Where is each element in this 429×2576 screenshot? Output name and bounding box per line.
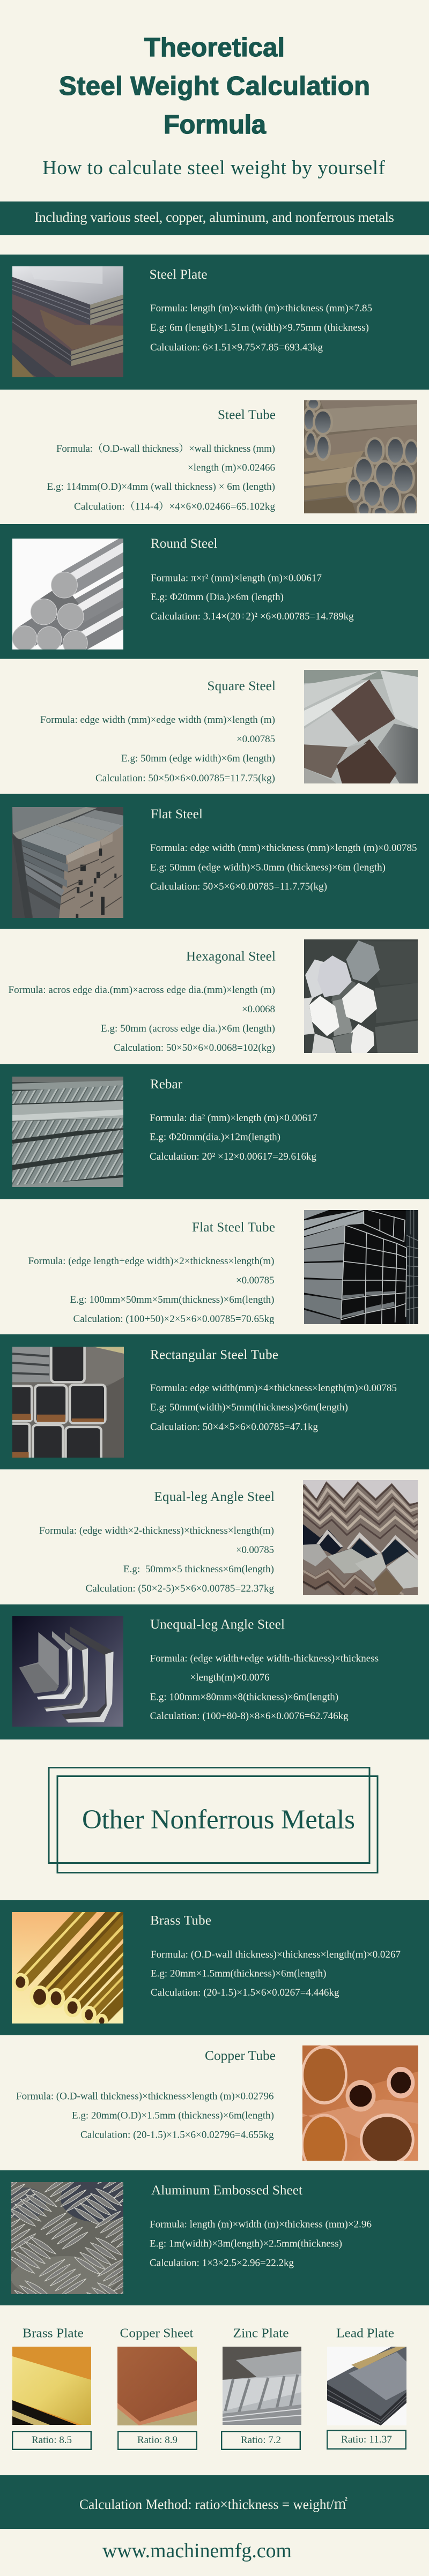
formula text: Formula:（O.D-wall thickness）×wall thickness (mm): [56, 443, 275, 454]
photo: hexagonal steel bars: [304, 939, 418, 1053]
band: calculation method: Calculation Method: ratio×thickness = weight/㎡: [79, 2497, 347, 2512]
panel: round steel: [0, 524, 429, 659]
formula text: E.g: 50mm (edge width)×6m (length): [121, 753, 275, 764]
formula text: E.g: 50mm(width)×5mm(thickness)×6m(length): [150, 1402, 348, 1413]
formula text: E.g: 50mm×5 thickness×6m(length): [123, 1564, 274, 1575]
photo: copper tubes: [302, 2045, 418, 2161]
formula text: [40, 714, 275, 784]
formula text: Calculation: (20-1.5)×1.5×6×0.02796=4.655kg: [80, 2130, 274, 2140]
heading: square steel: Square Steel: [207, 679, 276, 693]
formula text: Calculation: (20-1.5)×1.5×6×0.0267=4.446kg: [151, 1987, 339, 1998]
band: calculation method: [0, 2475, 429, 2529]
formula text: Calculation: 50×50×6×0.0068=102(kg): [114, 1042, 275, 1054]
formula text: [39, 1525, 275, 1594]
formula text: [16, 2091, 274, 2140]
panel: brass tube: [0, 1900, 429, 2035]
formula text: E.g: 100mm×50mm×5mm(thickness)×6m(length): [70, 1294, 275, 1305]
formula text: [150, 1112, 317, 1162]
formula text: Calculation: 6×1.51×9.75×7.85=693.43kg: [150, 342, 323, 353]
photo: round steel bars: [12, 539, 123, 649]
card: zinc plate: Ratio: 7.2: [241, 2435, 281, 2446]
card: brass plate: Brass Plate: [23, 2327, 84, 2341]
formula text: E.g: 50mm (edge width)×5.0mm (thickness)×6m (length): [150, 862, 386, 873]
formula text: ×0.00785: [236, 734, 275, 745]
card: lead plate: Ratio: 11.37: [341, 2434, 392, 2445]
heading: equal-leg angle steel: Equal-leg Angle Steel: [154, 1490, 275, 1504]
heading: hexagonal steel: Hexagonal Steel: [186, 950, 276, 964]
heading: flat steel: Flat Steel: [151, 807, 203, 822]
formula text: [47, 443, 276, 512]
formula text: E.g: 6m (length)×1.51m (width)×9.75mm (thickness): [150, 322, 369, 333]
panel: aluminum embossed sheet: [0, 2167, 429, 2319]
title: Steel Weight Calculation: [59, 72, 370, 101]
heading: flat steel tube: Flat Steel Tube: [192, 1220, 275, 1235]
formula text: Formula: length (m)×width (m)×thickness (mm)×7.85: [150, 303, 372, 314]
photo: unequal-leg angle steel: [12, 1616, 123, 1727]
subtitle: How to calculate steel weight by yourself: [42, 157, 386, 179]
formula text: Formula: length (m)×width (m)×thickness (mm)×2.96: [150, 2219, 372, 2230]
panel: unequal-leg angle steel: [0, 1604, 429, 1739]
panel: flat steel: [0, 794, 429, 929]
section heading: other nonferrous metals: Other Nonferrous Metals: [82, 1805, 355, 1835]
heading: copper tube: Copper Tube: [205, 2049, 276, 2063]
banner: scope: Including various steel, copper, aluminum, and nonferrous metals: [34, 209, 394, 225]
formula text: ×length (m)×0.02466: [188, 462, 275, 474]
heading: aluminum embossed sheet: Aluminum Embossed Sheet: [151, 2183, 302, 2198]
formula text: [151, 572, 354, 622]
section heading: other nonferrous metals: [49, 1767, 378, 1872]
formula text: Calculation: 50×50×6×0.00785=117.75(kg): [95, 773, 275, 784]
formula text: E.g: Φ20mm(dia.)×12m(length): [150, 1132, 280, 1143]
photo: brass plate: [12, 2347, 91, 2425]
formula text: [150, 2219, 372, 2269]
panel: rectangular steel tube: [0, 1334, 429, 1469]
formula text: Formula: (edge width+edge width-thickness)×thickness: [150, 1653, 379, 1664]
heading: unequal-leg angle steel: Unequal-leg Angle Steel: [150, 1617, 285, 1632]
title: [59, 33, 370, 139]
formula text: E.g: 20mm×1.5mm(thickness)×6m(length): [151, 1968, 326, 1980]
panel: hexagonal steel: [9, 939, 418, 1054]
panel: flat steel tube: [28, 1210, 418, 1325]
photo: stacked steel tubes: [304, 400, 417, 513]
photo: stacked steel plates: [12, 266, 123, 377]
banner: scope: [0, 201, 429, 235]
card: brass plate: [12, 2327, 91, 2450]
panel: equal-leg angle steel: [39, 1480, 418, 1595]
formula text: Calculation: (50×2-5)×5×6×0.00785=22.37kg: [86, 1583, 275, 1594]
formula text: Calculation: (100+80-8)×8×6×0.0076=62.746kg: [150, 1711, 349, 1722]
heading: rectangular steel tube: Rectangular Steel Tube: [150, 1348, 278, 1362]
formula text: Formula: edge width (mm)×edge width (mm)×length (m): [40, 714, 275, 726]
panel: steel plate: [0, 255, 429, 390]
formula text: [28, 1256, 275, 1325]
title: Formula: [164, 110, 267, 139]
formula text: Formula: edge width (mm)×thickness (mm)×length (m)×0.00785: [150, 842, 417, 854]
formula text: Calculation: (100+50)×2×5×6×0.00785=70.65kg: [73, 1313, 275, 1325]
formula text: Formula: (edge width×2-thickness)×thickness×length(m): [39, 1525, 274, 1536]
formula text: E.g: 114mm(O.D)×4mm (wall thickness) × 6m (length): [47, 481, 275, 492]
card: copper sheet: Ratio: 8.9: [137, 2435, 177, 2446]
footer: website: www.machinemfg.com: [102, 2540, 292, 2562]
card: copper sheet: [117, 2327, 197, 2450]
formula text: Formula: (edge length+edge width)×2×thickness×length(m): [28, 1256, 275, 1267]
panel: square steel: [40, 670, 418, 784]
formula text: ×0.00785: [236, 1275, 275, 1286]
formula text: Formula: edge width(mm)×4×thickness×length(m)×0.00785: [150, 1383, 397, 1394]
photo: equal-leg angle steel: [303, 1480, 418, 1595]
heading: brass tube: Brass Tube: [150, 1913, 211, 1928]
formula text: [150, 842, 417, 892]
photo: flat steel tubes: [304, 1210, 418, 1324]
formula text: [151, 1949, 401, 1998]
heading: rebar: Rebar: [150, 1077, 183, 1092]
card: copper sheet: Copper Sheet: [120, 2327, 194, 2341]
heading: round steel: Round Steel: [151, 536, 218, 551]
photo: rebar: [12, 1077, 123, 1187]
card: zinc plate: [221, 2327, 301, 2450]
photo: copper sheet: [117, 2347, 197, 2425]
formula text: E.g: Φ20mm (Dia.)×6m (length): [151, 592, 284, 603]
photo: square steel bars: [304, 670, 418, 783]
formula text: Calculation: 50×4×5×6×0.00785=47.1kg: [150, 1421, 319, 1433]
formula text: E.g: 20mm(O.D)×1.5mm (thickness)×6m(length): [72, 2110, 274, 2121]
photo: aluminum tread plate: [11, 2182, 123, 2294]
formula text: Calculation: 50×5×6×0.00785=11.7.75(kg): [150, 881, 327, 892]
formula text: [150, 1653, 379, 1722]
formula text: Formula: acros edge dia.(mm)×across edge dia.(mm)×length (m): [9, 984, 275, 996]
heading: steel plate: Steel Plate: [150, 267, 208, 282]
card: zinc plate: Zinc Plate: [233, 2327, 289, 2341]
photo: brass tubes: [12, 1912, 123, 2024]
formula text: E.g: 100mm×80mm×8(thickness)×6m(length): [150, 1692, 338, 1703]
formula text: [150, 1383, 397, 1433]
photo: flat steel bars: [12, 807, 123, 918]
formula text: Formula: π×r² (mm)×length (m)×0.00617: [151, 572, 322, 584]
card: brass plate: Ratio: 8.5: [32, 2435, 72, 2446]
formula text: E.g: 1m(width)×3m(length)×2.5mm(thickness): [150, 2238, 342, 2250]
card: lead plate: [327, 2327, 406, 2449]
panel: rebar: [0, 1064, 429, 1199]
formula text: Calculation:（114-4）×4×6×0.02466=65.102kg: [74, 501, 276, 512]
formula text: ×0.00785: [236, 1544, 274, 1556]
photo: lead plate: [327, 2347, 406, 2425]
formula text: [9, 984, 275, 1054]
card: lead plate: Lead Plate: [336, 2327, 394, 2341]
formula text: Calculation: 20² ×12×0.00617=29.616kg: [150, 1151, 316, 1162]
formula text: Formula: (O.D-wall thickness)×thickness×length (m)×0.02796: [16, 2091, 274, 2102]
formula text: Calculation: 1×3×2.5×2.96=22.2kg: [150, 2258, 294, 2269]
formula text: ×0.0068: [242, 1004, 275, 1015]
formula text: Calculation: 3.14×(20÷2)² ×6×0.00785=14.789kg: [151, 611, 354, 622]
formula text: [150, 303, 372, 353]
formula text: Formula: (O.D-wall thickness)×thickness×length(m)×0.0267: [151, 1949, 401, 1960]
panel: copper tube: [16, 2045, 418, 2175]
photo: rectangular steel tubes: [12, 1347, 124, 1458]
title: Theoretical: [144, 33, 285, 62]
formula text: E.g: 50mm (across edge dia.)×6m (length): [101, 1023, 275, 1034]
photo: zinc plate: [223, 2347, 301, 2425]
panel: steel tube: [47, 398, 418, 517]
heading: steel tube: Steel Tube: [218, 408, 276, 422]
formula text: Formula: dia² (mm)×length (m)×0.00617: [150, 1112, 317, 1124]
formula text: ×length(m)×0.0076: [190, 1672, 270, 1683]
